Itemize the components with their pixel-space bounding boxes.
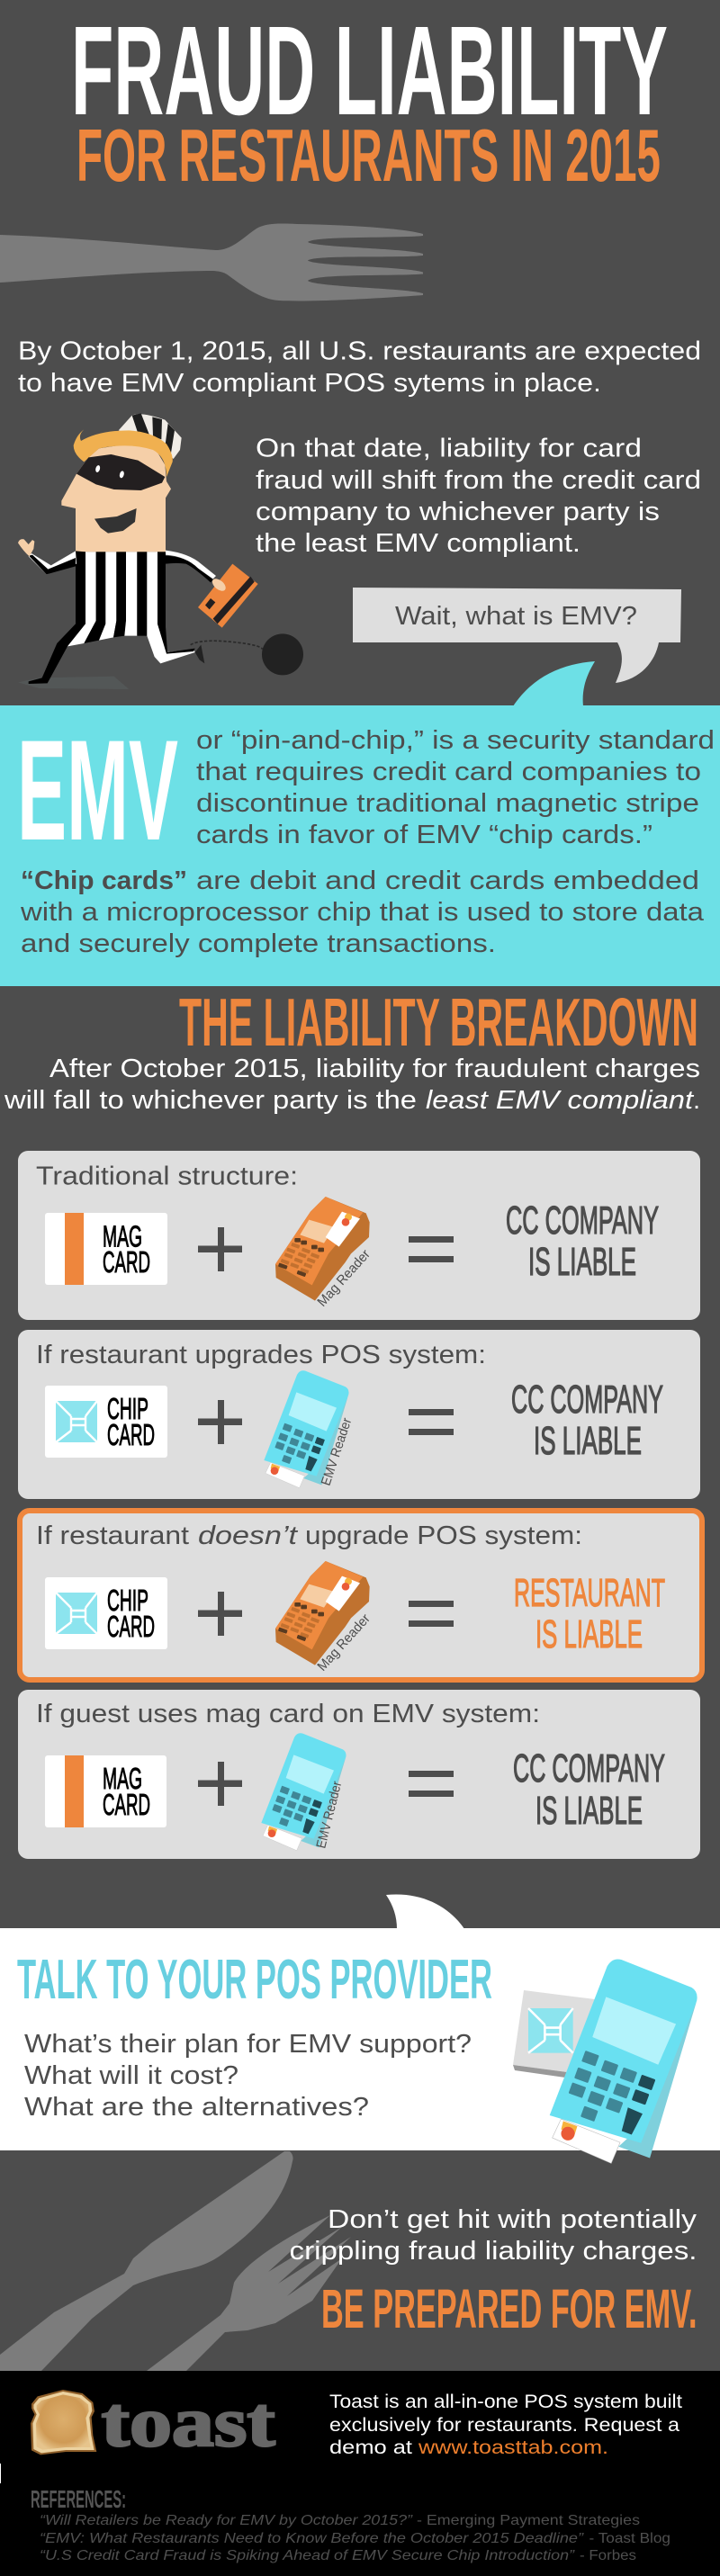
chip cards definition text: are debit and credit cards embedded [196, 866, 699, 895]
speech bubble: question: Wait, what is EMV? [395, 602, 637, 631]
plus sign [198, 1227, 242, 1271]
result: cc company is liable: IS LIABLE [534, 1419, 642, 1463]
EMV definition text: or “pin-and-chip,” is a security standard [196, 726, 715, 755]
questions list [24, 2030, 472, 2122]
toast description: Toast is an all-in-one POS system built [329, 2392, 682, 2412]
references list [40, 2513, 670, 2563]
icon: EMV reader [261, 1733, 346, 1851]
result: cc company is liable [506, 1198, 659, 1284]
text: intro paragraph [18, 337, 701, 398]
toast description [329, 2392, 682, 2458]
panel: closing call to action [0, 2151, 698, 2371]
plus sign [198, 1400, 242, 1444]
panel: EMV definition [0, 661, 720, 986]
icon: mag reader [275, 1197, 374, 1310]
title [71, 0, 668, 197]
text: breakdown intro [4, 1055, 700, 1115]
illustration: running thief with stolen card [18, 413, 303, 689]
chip card [45, 1577, 167, 1649]
text: breakdown intro: will fall to whichever party is the [4, 1086, 417, 1115]
panel heading [36, 1521, 582, 1550]
plus sign [198, 1762, 242, 1806]
thief striped body and legs [29, 551, 204, 684]
text: breakdown intro: After October 2015, liability for fraudulent charges [50, 1055, 700, 1083]
illustration: big EMV reader and chip card [513, 1960, 698, 2163]
result: cc company is liable [511, 1378, 663, 1463]
plus sign [198, 1592, 242, 1636]
EMV definition text [196, 726, 715, 849]
chip cards definition text [20, 866, 705, 958]
icon: fork silhouette [147, 2215, 351, 2371]
logo wordmark: toast [102, 2383, 275, 2461]
closing text: crippling fraud liability charges. [290, 2237, 697, 2266]
panel: guest uses mag card on EMV system [18, 1690, 700, 1859]
questions list: What are the alternatives? [24, 2093, 369, 2122]
chip cards definition text: with a microprocessor chip that is used to store data [20, 898, 705, 927]
mag card: CARD [103, 1245, 150, 1279]
toast description: demo at [329, 2437, 412, 2458]
equals sign [409, 1601, 454, 1627]
closing text [290, 2205, 698, 2266]
equals sign [409, 1409, 454, 1435]
panel heading: If restaurant [36, 1521, 189, 1550]
references list: “Will Retailers be Ready for EMV by October 2015?” [40, 2513, 413, 2528]
references heading: REFERENCES: [31, 2485, 126, 2513]
icon: mag reader [275, 1561, 374, 1674]
chip card: CHIP [107, 1584, 148, 1617]
text: breakdown intro: . [693, 1086, 700, 1115]
panel: restaurant does not upgrade, highlighted [20, 1511, 702, 1680]
references list: - Toast Blog [589, 2531, 670, 2546]
references list: “U.S Credit Card Fraud is Spiking Ahead of EMV Secure Chip Introduction” [40, 2548, 575, 2563]
text: liability shift paragraph: company to whichever party is [256, 498, 660, 526]
panel: talk to your POS provider [0, 1894, 720, 2150]
text: breakdown intro: least EMV compliant [426, 1086, 695, 1115]
thief hat [119, 413, 182, 459]
thief head [61, 429, 173, 552]
speech bubble: question [353, 588, 681, 683]
icon: EMV reader [264, 1370, 355, 1488]
questions list: What’s their plan for EMV support? [24, 2030, 472, 2059]
mag card [45, 1213, 167, 1285]
text: intro paragraph: By October 1, 2015, all U.S. restaurants are expected [18, 337, 701, 365]
EMV definition text: that requires credit card companies to [196, 758, 701, 786]
footer [0, 2371, 720, 2576]
icon: mag reader: Mag Reader [314, 1247, 374, 1310]
text: intro paragraph: to have EMV compliant POS sytems in place. [18, 369, 601, 398]
icon: toast slice [31, 2390, 96, 2455]
chip card: CHIP [107, 1392, 148, 1425]
result: restaurant is liable [514, 1571, 665, 1656]
result: cc company is liable: IS LIABLE [536, 1789, 643, 1833]
stolen card [198, 564, 258, 628]
EMV definition text: cards in favor of EMV “chip cards.” [196, 821, 652, 849]
icon: EMV reader: EMV Reader [319, 1416, 355, 1487]
chip card: CARD [107, 1418, 155, 1451]
toast description: exclusively for restaurants. Request a [329, 2415, 680, 2436]
mag card: MAG [103, 1762, 142, 1795]
chip cards definition text: and securely complete transactions. [21, 929, 496, 958]
panel heading: Traditional structure: [36, 1162, 298, 1191]
references list: “EMV: What Restaurants Need to Know Before the October 2015 Deadline” [40, 2531, 584, 2546]
mag card: CARD [103, 1788, 150, 1821]
icon: fork silhouette [0, 224, 423, 301]
equals sign [409, 1236, 454, 1262]
questions list: What will it cost? [24, 2061, 238, 2090]
thief arms and hands [18, 539, 216, 582]
result: cc company is liable: IS LIABLE [528, 1240, 636, 1284]
equals sign [409, 1771, 454, 1797]
panel heading: doesn’t [198, 1521, 299, 1550]
panel heading: If restaurant upgrades POS system: [36, 1341, 486, 1369]
panel heading: If guest uses mag card on EMV system: [36, 1700, 540, 1728]
panel: traditional structure [18, 1151, 700, 1320]
panel heading: upgrade POS system: [305, 1521, 582, 1550]
text: liability shift paragraph: fraud will shift from the credit card [256, 466, 701, 495]
text: liability shift paragraph [256, 434, 701, 558]
text: liability shift paragraph: the least EMV compliant. [256, 529, 580, 558]
EMV definition text: discontinue traditional magnetic stripe [196, 789, 699, 818]
icon: knife silhouette [0, 2151, 293, 2371]
closing text: Don’t get hit with potentially [328, 2205, 698, 2234]
references list: - Emerging Payment Strategies [417, 2513, 640, 2528]
references list: - Forbes [580, 2548, 636, 2563]
icon: EMV reader: EMV Reader [313, 1780, 345, 1850]
EMV big heading: EMV [17, 710, 178, 870]
text: liability shift paragraph: On that date, liability for card [256, 434, 642, 462]
toast description: www.toasttab.com. [418, 2437, 608, 2458]
ball and chain [191, 633, 303, 675]
chip card [45, 1386, 167, 1458]
result: cc company is liable [513, 1746, 665, 1833]
panel: restaurant upgrades [18, 1330, 700, 1499]
mag card [45, 1755, 166, 1827]
mag card: MAG [103, 1220, 142, 1252]
chip card: CARD [107, 1610, 155, 1643]
chip cards definition text: “Chip cards” [21, 866, 187, 895]
result: restaurant is liable: IS LIABLE [536, 1612, 643, 1656]
icon: mag reader: Mag Reader [314, 1611, 374, 1674]
